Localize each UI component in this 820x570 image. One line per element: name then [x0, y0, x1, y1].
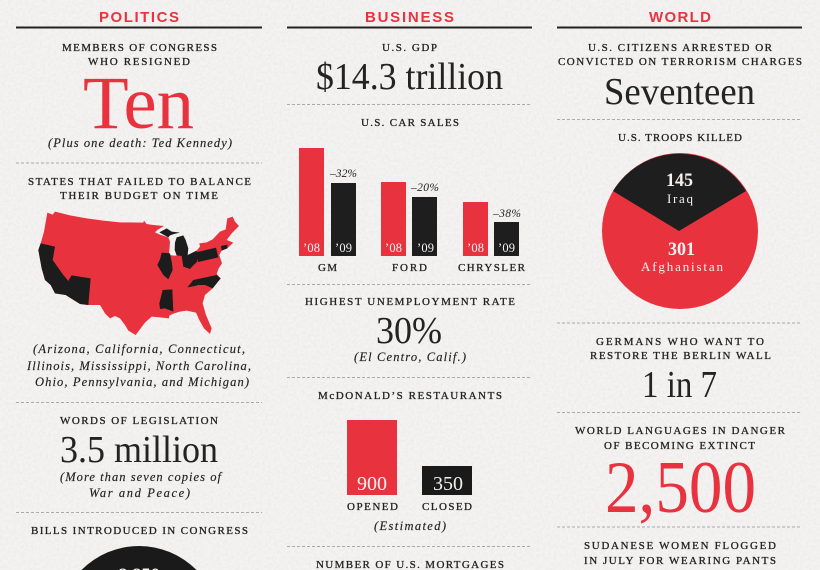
stat: members of congress who resigned: MEMBERS OF CONGRESS [62, 42, 217, 54]
bar chart: U.S. car sales: U.S. CAR SALES [361, 117, 459, 129]
panel: business column [287, 9, 532, 570]
stat: states that failed to balance their budget: THEIR BUDGET ON TIME [60, 190, 218, 202]
stat: words of legislation: WORDS OF LEGISLATION [60, 415, 218, 427]
bars: Ford: FORD [392, 262, 427, 274]
pie chart: U.S. troops killed: 301 [668, 239, 695, 260]
heading: world: WORLD [649, 9, 711, 26]
stat: words of legislation: 3.5 million [60, 429, 218, 471]
pie chart: U.S. troops killed: Afghanistan [641, 259, 724, 274]
map: United States with late-budget states in black [38, 212, 239, 335]
bar chart: McDonald's restaurants: CLOSED [422, 501, 472, 513]
pie chart: U.S. troops killed: Iraq [667, 191, 694, 206]
stat: members of congress who resigned [48, 42, 232, 150]
stat: members of congress who resigned: (Plus one death: Ted Kennedy) [48, 136, 232, 150]
stat: Germans who want to restore the Berlin Wall: GERMANS WHO WANT TO [596, 336, 764, 348]
stat: words of legislation [60, 415, 223, 500]
panel: world column [557, 9, 802, 567]
stat: Germans who want to restore the Berlin Wall: 1 in 7 [642, 364, 717, 406]
stat: world languages in danger of becoming extinct: 2,500 [605, 447, 756, 529]
stat: U.S. GDP: $14.3 trillion [316, 56, 503, 98]
bar chart: McDonald's restaurants [318, 390, 502, 533]
stat: words of legislation: War and Peace) [89, 486, 190, 500]
stat: members of congress who resigned: WHO RESIGNED [88, 56, 190, 68]
stat: world languages in danger of becoming extinct: OF BECOMING EXTINCT [604, 440, 755, 452]
bars: Chrysler: –38% [492, 208, 521, 220]
stat: highest unemployment rate: (El Centro, Calif.) [354, 350, 466, 364]
stat: world languages in danger of becoming extinct [575, 425, 786, 529]
bar chart: U.S. car sales [299, 117, 526, 274]
stat: citizens arrested on terrorism charges [558, 42, 802, 113]
bar chart: McDonald's restaurants: OPENED [347, 501, 398, 513]
stat: Germans who want to restore the Berlin Wall: RESTORE THE BERLIN WALL [590, 350, 771, 362]
stat: Sudanese women flogged for wearing pants: SUDANESE WOMEN FLOGGED [584, 540, 776, 552]
bar chart: McDonald's restaurants: (Estimated) [374, 519, 446, 533]
bar chart: McDonald's restaurants: 900 [357, 473, 387, 495]
stat: world languages in danger of becoming extinct: WORLD LANGUAGES IN DANGER [575, 425, 786, 437]
bars: GM [299, 148, 357, 274]
stat: citizens arrested on terrorism charges: CONVICTED ON TERRORISM CHARGES [558, 56, 802, 68]
stat: states that failed to balance their budget: (Arizona, California, Connecticut, [33, 342, 245, 356]
stat: members of congress who resigned: Ten [83, 62, 194, 145]
stat: states that failed to balance their budget: STATES THAT FAILED TO BALANCE [28, 176, 251, 188]
bars: Ford: ’09 [417, 241, 434, 255]
stat: words of legislation: (More than seven copies of [60, 470, 223, 484]
bars: Ford: –20% [410, 182, 439, 194]
stat: states that failed to balance their budget: Ohio, Pennsylvania, and Michigan) [35, 375, 249, 389]
bars: GM: ’09 [335, 241, 352, 255]
stat: states that failed to balance their budget: Illinois, Mississippi, North Carolina, [26, 359, 251, 373]
panel: politics column [16, 9, 262, 570]
bars: Ford: ’08 [385, 241, 402, 255]
stat: highest unemployment rate: 30% [376, 310, 442, 352]
stat: U.S. GDP: U.S. GDP [382, 42, 437, 54]
stat: highest unemployment rate: HIGHEST UNEMPLOYMENT RATE [305, 296, 515, 308]
stat: Sudanese women flogged for wearing pants [584, 540, 776, 567]
pie chart: U.S. troops killed: 145 [666, 170, 693, 191]
bar chart: McDonald's restaurants: McDONALD’S RESTAURANTS [318, 390, 502, 402]
stat: bills introduced in congress [31, 525, 248, 570]
stat: Germans who want to restore the Berlin Wall [590, 336, 771, 406]
pie chart: U.S. troops killed: U.S. TROOPS KILLED [618, 132, 742, 144]
heading: business: BUSINESS [365, 9, 454, 26]
bars: Chrysler [458, 202, 526, 274]
bars: GM: GM [318, 262, 337, 274]
bars: GM: ’08 [303, 241, 320, 255]
bars: Chrysler: ’09 [498, 241, 515, 255]
bar chart: McDonald's restaurants: 350 [433, 473, 463, 495]
bars: Chrysler: ’08 [467, 241, 484, 255]
stat: states that failed to balance their budget [26, 176, 251, 389]
pie chart: U.S. troops killed [602, 132, 758, 309]
stat: bills introduced in congress: BILLS INTRODUCED IN CONGRESS [31, 525, 248, 537]
bars: Chrysler: CHRYSLER [458, 262, 526, 274]
bars: GM: –32% [329, 168, 357, 180]
bars: Ford [381, 182, 439, 274]
heading: politics: POLITICS [99, 9, 179, 26]
stat: citizens arrested on terrorism charges: Seventeen [604, 71, 755, 113]
stat: highest unemployment rate [305, 296, 515, 364]
stat: Sudanese women flogged for wearing pants: IN JULY FOR WEARING PANTS [584, 555, 776, 567]
stat: citizens arrested on terrorism charges: U.S. CITIZENS ARRESTED OR [588, 42, 773, 54]
